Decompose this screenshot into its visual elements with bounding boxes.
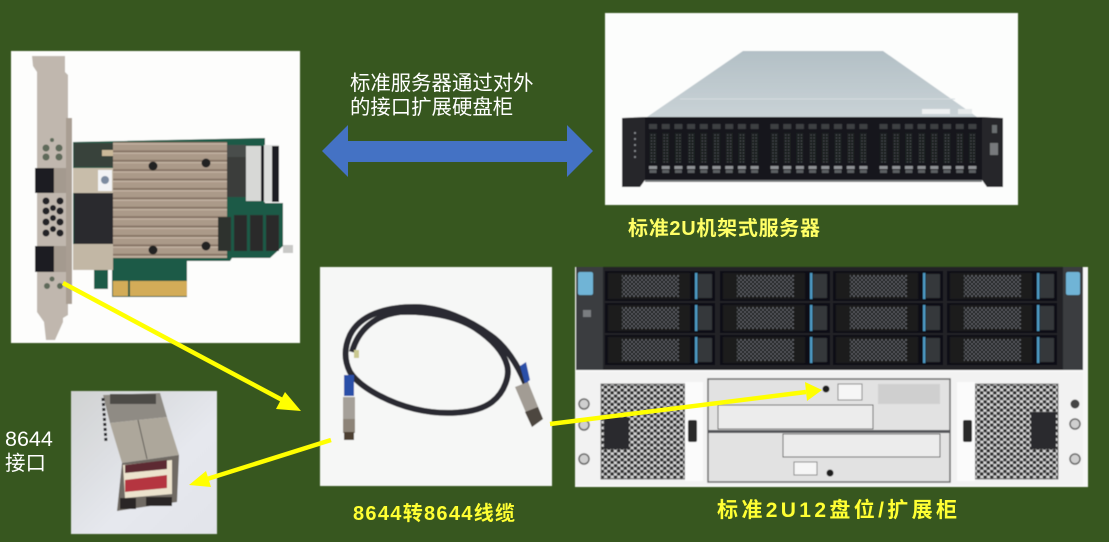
photo panel: 2U12 enclosure: [575, 267, 1088, 487]
caption: 8644 interface: 8644: [5, 427, 53, 451]
photo panel: 8644 cable: [320, 267, 552, 486]
photo panel: 2U rack server: [605, 13, 1018, 205]
arrow: cable to enclosure port: [550, 382, 822, 424]
arrow: card to cable: [63, 283, 301, 411]
photo panel: RAID card: [11, 51, 300, 343]
photo panel: 8644 connector close-up: [71, 391, 217, 534]
caption: 2U12 enclosure: 标准2U12盘位/扩展柜: [717, 498, 957, 522]
caption: server expansion note: 标准服务器通过对外: [350, 72, 534, 95]
arrow: cable to connector: [189, 440, 331, 487]
caption: 8644 interface: 接口: [5, 452, 46, 475]
caption: 8644 cable: 8644转8644线缆: [353, 502, 515, 525]
caption: 2U rack server: 标准2U机架式服务器: [628, 217, 820, 240]
caption: server expansion note: 的接口扩展硬盘柜: [350, 96, 513, 119]
arrow: blue double-headed: [322, 125, 593, 177]
